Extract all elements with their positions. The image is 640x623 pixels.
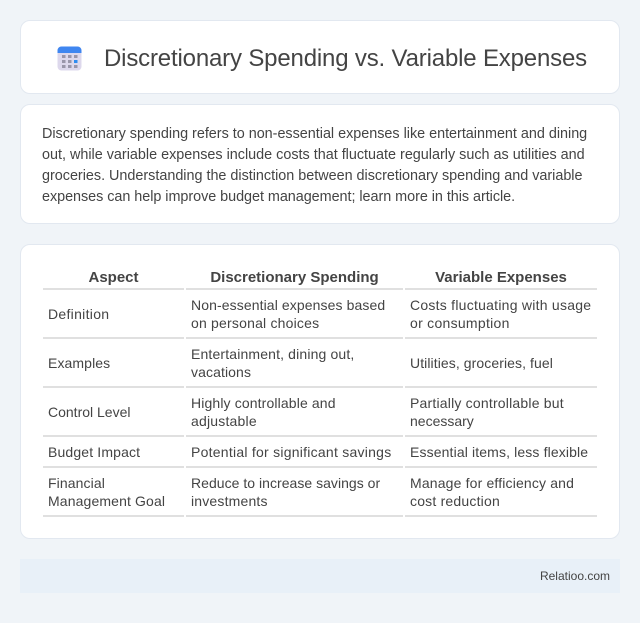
table rows: Highly controllable and — [191, 395, 336, 411]
table rows: or consumption — [410, 315, 510, 331]
intro text — [42, 126, 587, 205]
intro text: expenses can help improve budget management; learn more in this article. — [42, 189, 515, 205]
table header: Aspect — [88, 269, 139, 286]
table rows: Partially controllable but — [410, 395, 564, 411]
table rows: Examples — [48, 355, 110, 371]
title: Discretionary Spending vs. Variable Expenses — [104, 45, 587, 72]
table rows: on personal choices — [191, 315, 319, 331]
table rows: Manage for efficiency and — [410, 475, 574, 491]
table rows: Reduce to increase savings or — [191, 475, 380, 491]
table rows: adjustable — [191, 413, 257, 429]
table rows: Utilities, groceries, fuel — [410, 355, 553, 371]
table rows: Non-essential expenses based — [191, 297, 385, 313]
table rows: Potential for significant savings — [191, 444, 391, 460]
table rows: Budget Impact — [48, 444, 140, 460]
intro panel — [20, 104, 620, 224]
table rows: vacations — [191, 364, 251, 380]
table rows: Essential items, less flexible — [410, 444, 588, 460]
footer text: Relatioo.com — [540, 569, 610, 583]
table header — [43, 269, 597, 290]
table rows: Financial — [48, 475, 105, 491]
table rows: cost reduction — [410, 493, 500, 509]
intro text: out, while variable expenses include costs that fluctuate regularly such as utilities and — [42, 147, 585, 163]
table rows: Management Goal — [48, 493, 165, 509]
table rows: Costs fluctuating with usage — [410, 297, 591, 313]
intro text: Discretionary spending refers to non-essential expenses like entertainment and dining — [42, 126, 587, 142]
table rows: Entertainment, dining out, — [191, 346, 354, 362]
intro text: groceries. Understanding the distinction between discretionary spending and variable — [42, 168, 582, 184]
comparison table — [43, 269, 597, 517]
table header: Discretionary Spending — [210, 269, 379, 286]
table rows: Definition — [48, 306, 109, 322]
table rows: Control Level — [48, 404, 130, 420]
table rows: investments — [191, 493, 268, 509]
comparison table panel — [20, 244, 620, 539]
header panel — [20, 20, 620, 94]
table rows: necessary — [410, 413, 474, 429]
footer bar — [20, 559, 620, 593]
icon: calendar — [58, 46, 82, 70]
table header: Variable Expenses — [435, 269, 567, 286]
